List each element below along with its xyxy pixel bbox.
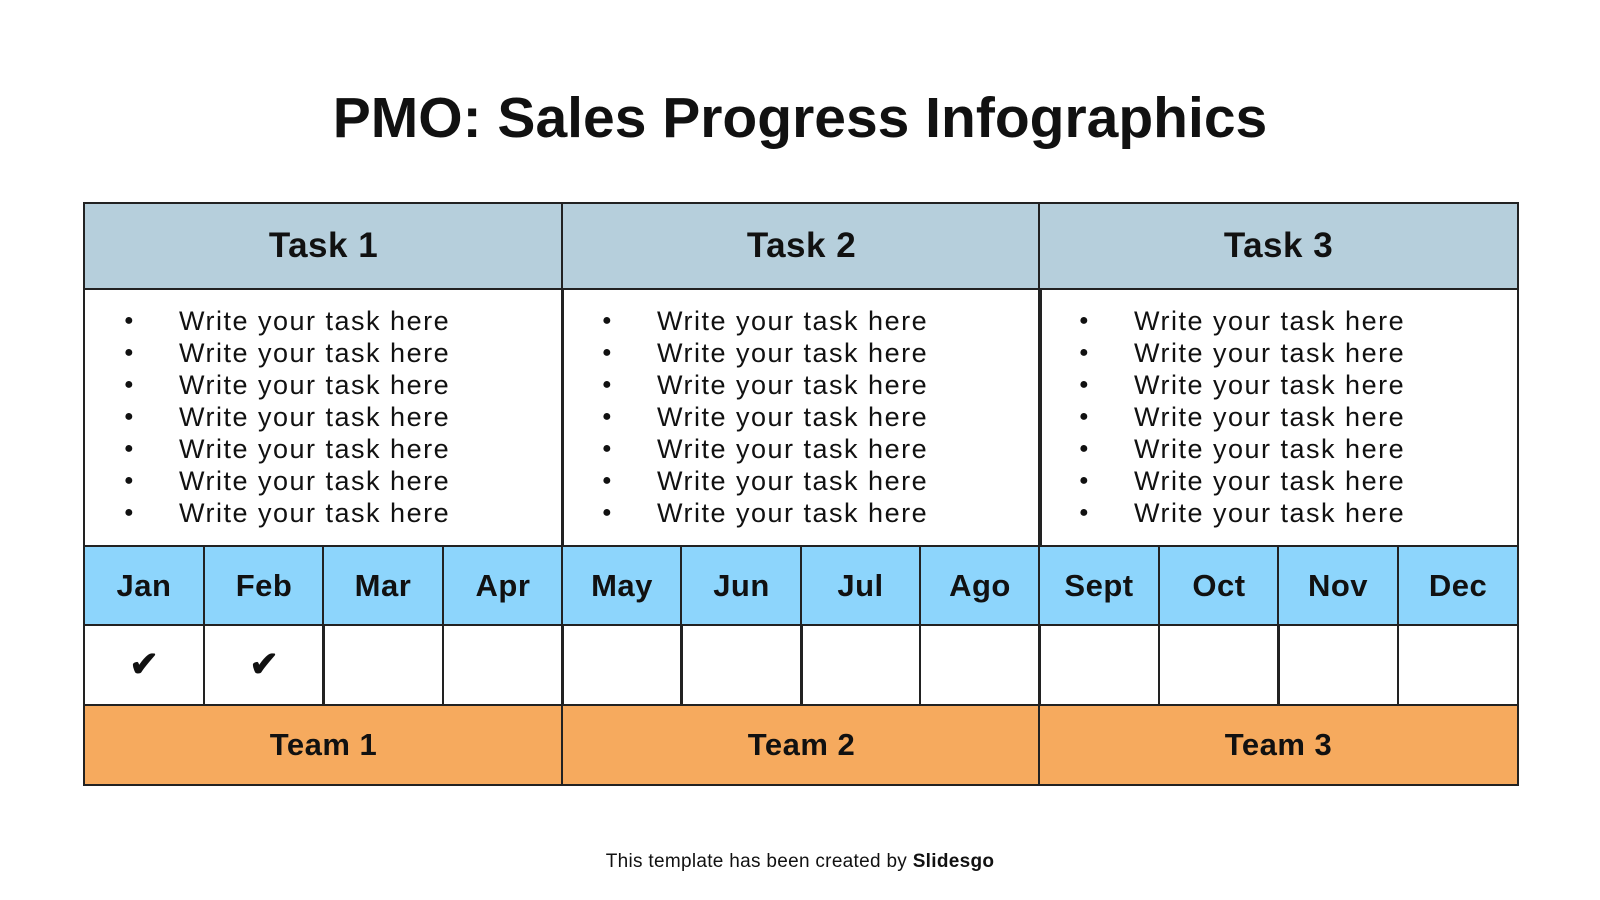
months row: Nov [1308,568,1368,602]
months row: Ago [949,568,1011,602]
months row: Sept [1064,568,1134,602]
task lists: Write your task here [657,402,928,432]
task lists: Write your task here [657,498,928,528]
footer: This template has been created by Slidesgo [606,851,994,872]
task lists: Write your task here [179,498,450,528]
teams row: Team 2 [748,727,855,762]
check row [83,626,1519,704]
months row: Jun [713,568,770,602]
months row: May [591,568,653,602]
check row: ✔ [249,645,279,684]
months row: Dec [1429,568,1487,602]
title: PMO: Sales Progress Infographics [333,86,1267,150]
months row: Mar [355,568,411,602]
task lists: Write your task here [657,338,928,368]
months row: Feb [236,568,292,602]
task lists: Write your task here [1134,338,1405,368]
task headers [83,202,1519,288]
task lists: Write your task here [179,466,450,496]
teams row [83,706,1519,786]
months row: Jan [117,568,171,602]
task lists: Write your task here [179,402,450,432]
task lists: Write your task here [1134,466,1405,496]
task lists: Write your task here [1134,402,1405,432]
task lists: Write your task here [1134,306,1405,336]
task lists: Write your task here [1134,370,1405,400]
teams row: Team 3 [1225,727,1332,762]
task lists: Write your task here [1134,498,1405,528]
task lists: Write your task here [179,306,450,336]
task lists: Write your task here [657,466,928,496]
months row: Oct [1192,568,1246,602]
task lists: Write your task here [179,338,450,368]
task headers: Task 2 [747,226,856,265]
task headers: Task 3 [1224,226,1333,265]
months row: Apr [476,568,530,602]
task lists: Write your task here [657,370,928,400]
task lists: Write your task here [179,370,450,400]
months row: Jul [837,568,884,602]
task lists: Write your task here [1134,434,1405,464]
task lists [83,290,1519,545]
teams row: Team 1 [270,727,377,762]
task lists: Write your task here [657,306,928,336]
task headers: Task 1 [269,226,378,265]
task lists: Write your task here [179,434,450,464]
check row: ✔ [129,645,159,684]
months row [83,547,1519,624]
task lists: Write your task here [657,434,928,464]
